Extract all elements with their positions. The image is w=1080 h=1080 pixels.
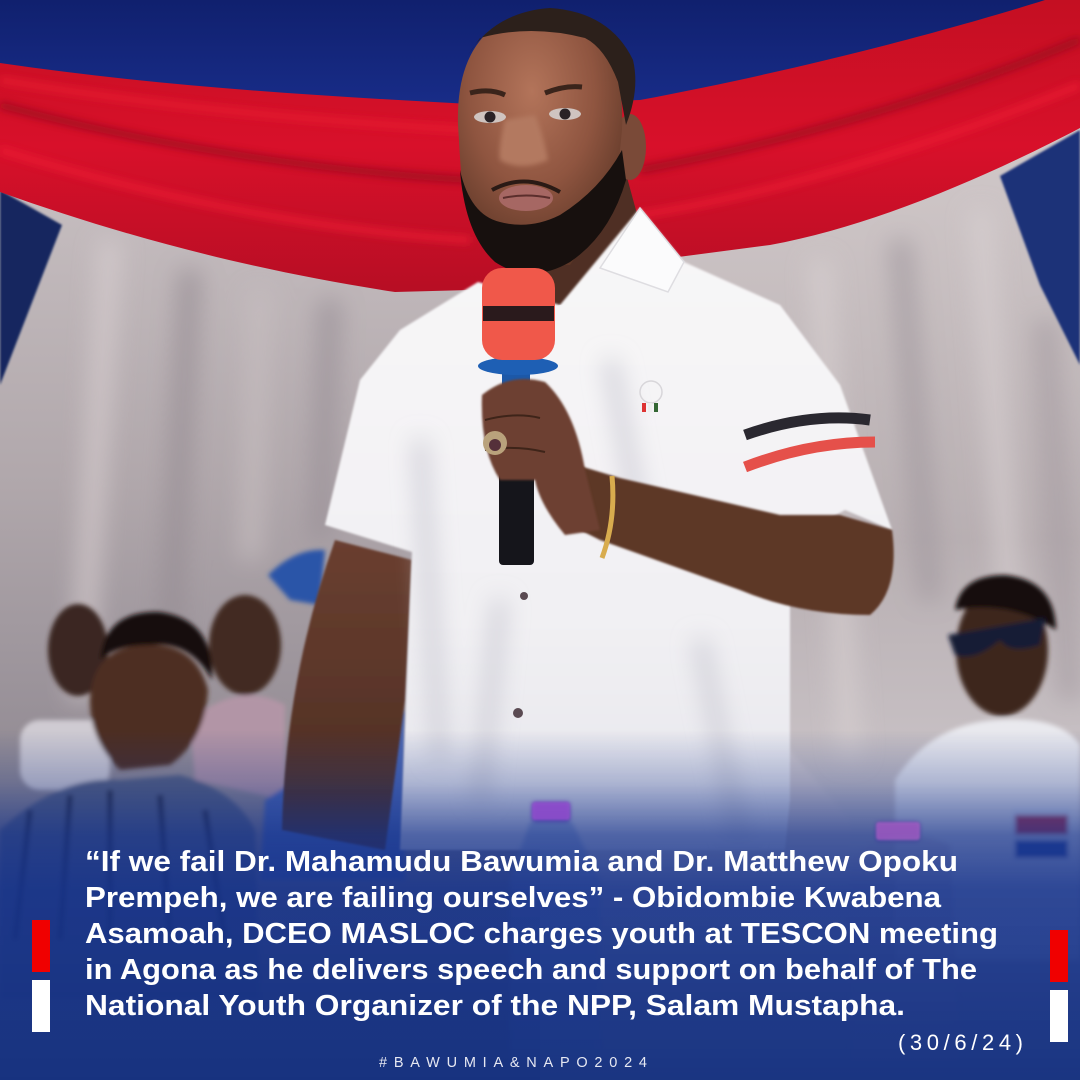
water bottles <box>510 802 960 1060</box>
hand <box>482 379 600 535</box>
eyes <box>474 108 581 123</box>
collar <box>600 208 684 292</box>
bottle caps above the fade <box>532 802 920 840</box>
date: (30/6/24) <box>898 1030 1023 1055</box>
beard <box>460 150 626 274</box>
red bunting <box>0 0 1080 292</box>
headline quote <box>85 846 998 1022</box>
ring <box>483 431 507 455</box>
bottom blue gradient overlay <box>0 730 1080 1080</box>
head <box>458 8 646 274</box>
neck <box>510 170 640 310</box>
headline quote: National Youth Organizer of the NPP, Salam Mustapha. <box>85 990 905 1022</box>
sleeve stripes <box>745 418 875 467</box>
bracelet <box>602 476 613 558</box>
headline quote: in Agona as he delivers speech and support on behalf of The <box>85 954 977 986</box>
eyebrows <box>470 87 582 95</box>
speaker <box>282 8 894 850</box>
hashtag: #BAWUMIA&NAPO2024 <box>379 1055 647 1071</box>
nose <box>500 115 548 166</box>
shirt buttons <box>513 477 534 718</box>
moustache <box>492 181 560 192</box>
headline quote: Prempeh, we are failing ourselves” - Obidombie Kwabena <box>85 882 942 914</box>
headline quote: “If we fail Dr. Mahamudu Bawumia and Dr. Matthew Opoku <box>85 846 958 878</box>
blue ceiling fabric <box>0 0 1080 130</box>
hair <box>468 8 635 125</box>
left arm <box>282 540 412 850</box>
shirt folds <box>420 360 740 840</box>
side drape right <box>1000 130 1080 365</box>
microphone <box>478 268 558 565</box>
side drape left <box>0 190 62 385</box>
face <box>458 17 622 265</box>
audience right <box>785 575 1080 960</box>
forearm <box>560 460 894 615</box>
chest logo <box>640 381 662 412</box>
lips <box>499 185 553 211</box>
ear <box>614 114 646 180</box>
accent bars left <box>32 920 50 1032</box>
audience left <box>0 550 405 1000</box>
accent bars right <box>1050 930 1068 1042</box>
shirt <box>325 208 892 850</box>
mouth line <box>503 196 550 198</box>
headline quote: Asamoah, DCEO MASLOC charges youth at TESCON meeting <box>85 918 998 950</box>
